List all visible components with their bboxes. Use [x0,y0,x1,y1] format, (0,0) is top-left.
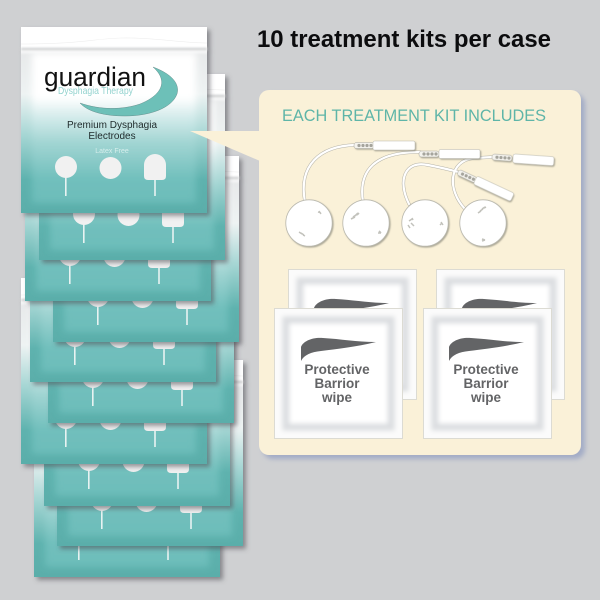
panel heading: EACH TREATMENT KIT INCLUDES [282,106,546,125]
pouch 5 [30,196,216,382]
wipe back left [288,270,416,400]
electrode disc 4 [460,200,506,246]
wipe front right [424,308,552,438]
wipe front left: Barrior [314,376,360,391]
panel: treatment kit [190,90,585,459]
electrode disc 2 [343,200,389,246]
wipe front left [274,308,402,438]
connector 3 [456,168,514,201]
pouch 4 [53,156,239,342]
product name: Premium Dysphagia [67,120,157,131]
pouch 9 [57,360,243,546]
pouch 6 [48,237,234,423]
pouch 3 [25,115,211,301]
wipe front right: Barrior [463,376,509,391]
wipe back right [436,270,564,400]
logo subtitle: Dysphagia Therapy [58,85,134,97]
product name line 2: Electrodes [88,131,136,142]
panel shadow [263,94,585,459]
electrode disc 3 [402,200,448,246]
lead wires [304,145,493,209]
wipe front right: Protective [453,362,519,377]
pouch 1 front [21,27,207,213]
electrode disc 1 [286,200,332,246]
connector 4 [492,152,554,166]
wipe front right: wipe [470,390,501,405]
pouch 8 [44,320,230,506]
wipe front left: wipe [321,390,352,405]
pouch 2 [39,74,225,260]
pouch stack [21,27,243,577]
pouch 7 [21,278,207,464]
logo word: guardian [44,62,146,92]
title: 10 treatment kits per case [257,26,551,53]
panel body [259,90,581,455]
callout pointer [190,131,260,161]
wipe front left: Protective [304,362,370,377]
connector 1 [354,141,415,150]
latex free: Latex Free [95,148,129,155]
connector 2 [419,150,480,158]
logo crescent [80,67,178,116]
pouch 10 [34,391,220,577]
electrode set [286,141,554,246]
